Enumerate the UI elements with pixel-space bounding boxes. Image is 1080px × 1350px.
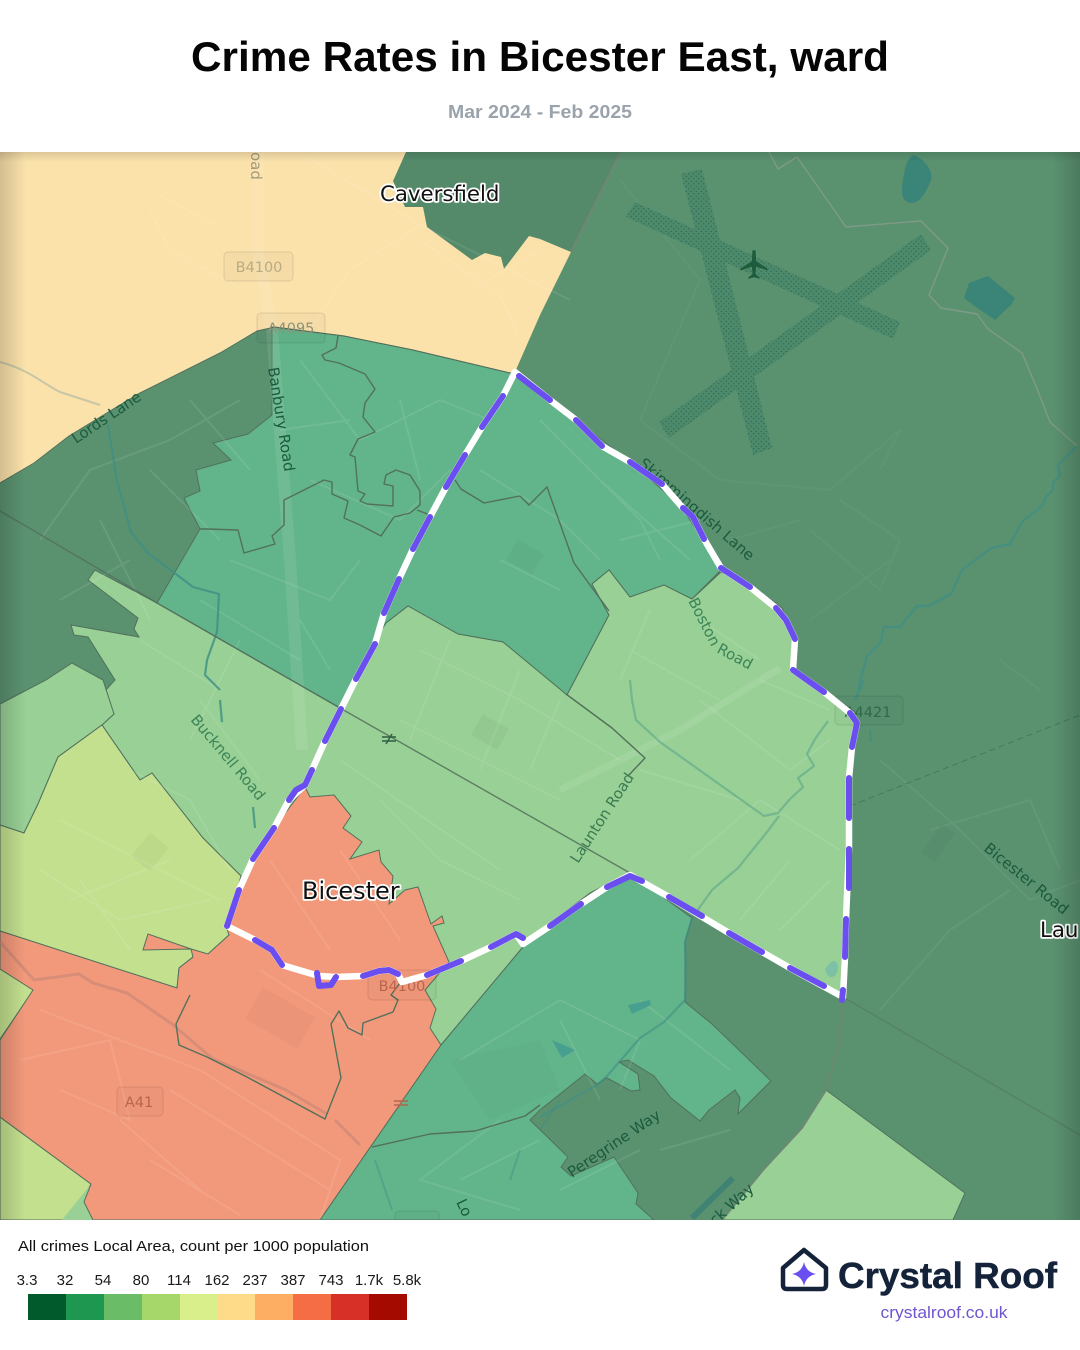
- place labels: Lau: [1040, 918, 1078, 943]
- legend scale labels: 3.3: [17, 1272, 37, 1289]
- shield labels: [125, 260, 891, 1111]
- subtitle: date range: Mar 2024 - Feb 2025: [448, 102, 632, 122]
- road names: Boston: [684, 595, 724, 649]
- ward boundary: Bicester East: [227, 372, 857, 1000]
- field pockets: [131, 539, 955, 1120]
- area: Caversfield low-rate zone: [0, 152, 571, 483]
- area: town centre high-rate zone: [0, 787, 449, 1220]
- shield labels: A4421: [845, 705, 891, 721]
- road names: Bucknell Road: [187, 711, 269, 804]
- shield labels: A4095: [268, 321, 314, 337]
- area: south-east light-green zone: [722, 1090, 965, 1220]
- map edge shading: [0, 152, 1080, 1220]
- lakes: [552, 155, 1015, 1058]
- shield labels: B4100: [379, 979, 425, 995]
- area: central light-green zone: [71, 570, 855, 1045]
- area: west light-green zone: [0, 663, 114, 833]
- area: yellow-green slivers: [0, 969, 33, 1038]
- area: west yellow-green zone: [0, 725, 241, 988]
- place labels: Caversfield: [380, 182, 499, 207]
- roads network: [20, 229, 840, 1220]
- road names: Peregrine Way: [564, 1106, 664, 1181]
- logo wordmark: Crystal Roof: [838, 1255, 1058, 1296]
- logo url: crystalroof.co.uk: [880, 1304, 1008, 1322]
- road names: Skimmingdish Lane: [635, 454, 758, 564]
- runways: [626, 169, 931, 455]
- legend scale labels: 387: [280, 1272, 306, 1289]
- legend scale labels: 743: [318, 1272, 344, 1289]
- ward boundary purple dashes: [227, 376, 857, 1000]
- road names: ck Way: [706, 1180, 758, 1229]
- internal boundaries: [0, 152, 1080, 1220]
- shield labels: B4100: [236, 260, 282, 276]
- legend scale labels: [17, 1272, 422, 1289]
- area: darker north pocket: [394, 163, 523, 259]
- shield labels: A41: [125, 1095, 153, 1111]
- legend scale labels: 237: [242, 1272, 268, 1289]
- legend: [17, 1238, 422, 1320]
- legend title: All crimes Local Area, count per 1000 population: [18, 1238, 369, 1255]
- area: north medium-green zone: [157, 327, 721, 708]
- legend scale labels: 54: [95, 1272, 111, 1289]
- legend scale labels: 80: [133, 1272, 149, 1289]
- road shields: [117, 252, 903, 1240]
- legend scale labels: 1.7k: [355, 1272, 384, 1289]
- logo: Crystal Roof: [783, 1250, 1058, 1322]
- legend scale labels: 32: [57, 1272, 73, 1289]
- road names: Lo: [452, 1196, 476, 1219]
- road names: Launton Road: [566, 770, 638, 866]
- road names: [68, 152, 1072, 1229]
- road names: Lords Lane: [68, 388, 145, 447]
- legend scale labels: 162: [204, 1272, 230, 1289]
- area: small light sliver: [62, 1186, 92, 1220]
- road names: Banbury Road: [264, 366, 298, 473]
- place labels: Bicester: [302, 877, 400, 905]
- area: south medium-green zone: [320, 873, 771, 1220]
- legend scale labels: 114: [167, 1272, 191, 1289]
- road names: Road: [714, 640, 756, 673]
- legend scale labels: 5.8k: [393, 1272, 422, 1289]
- icon: house with star: [783, 1250, 826, 1289]
- road names: oad: [247, 152, 265, 180]
- icon: rail stations: [382, 734, 408, 1108]
- legend colour swatches: [28, 1294, 407, 1320]
- ward boundary white base: [227, 372, 857, 997]
- rivers: [0, 425, 1077, 1218]
- place labels: [302, 182, 1078, 943]
- icon: airport: [740, 250, 768, 279]
- road names: Bicester Road: [980, 839, 1072, 918]
- title: Crime Rates in Bicester East, ward: [191, 33, 889, 80]
